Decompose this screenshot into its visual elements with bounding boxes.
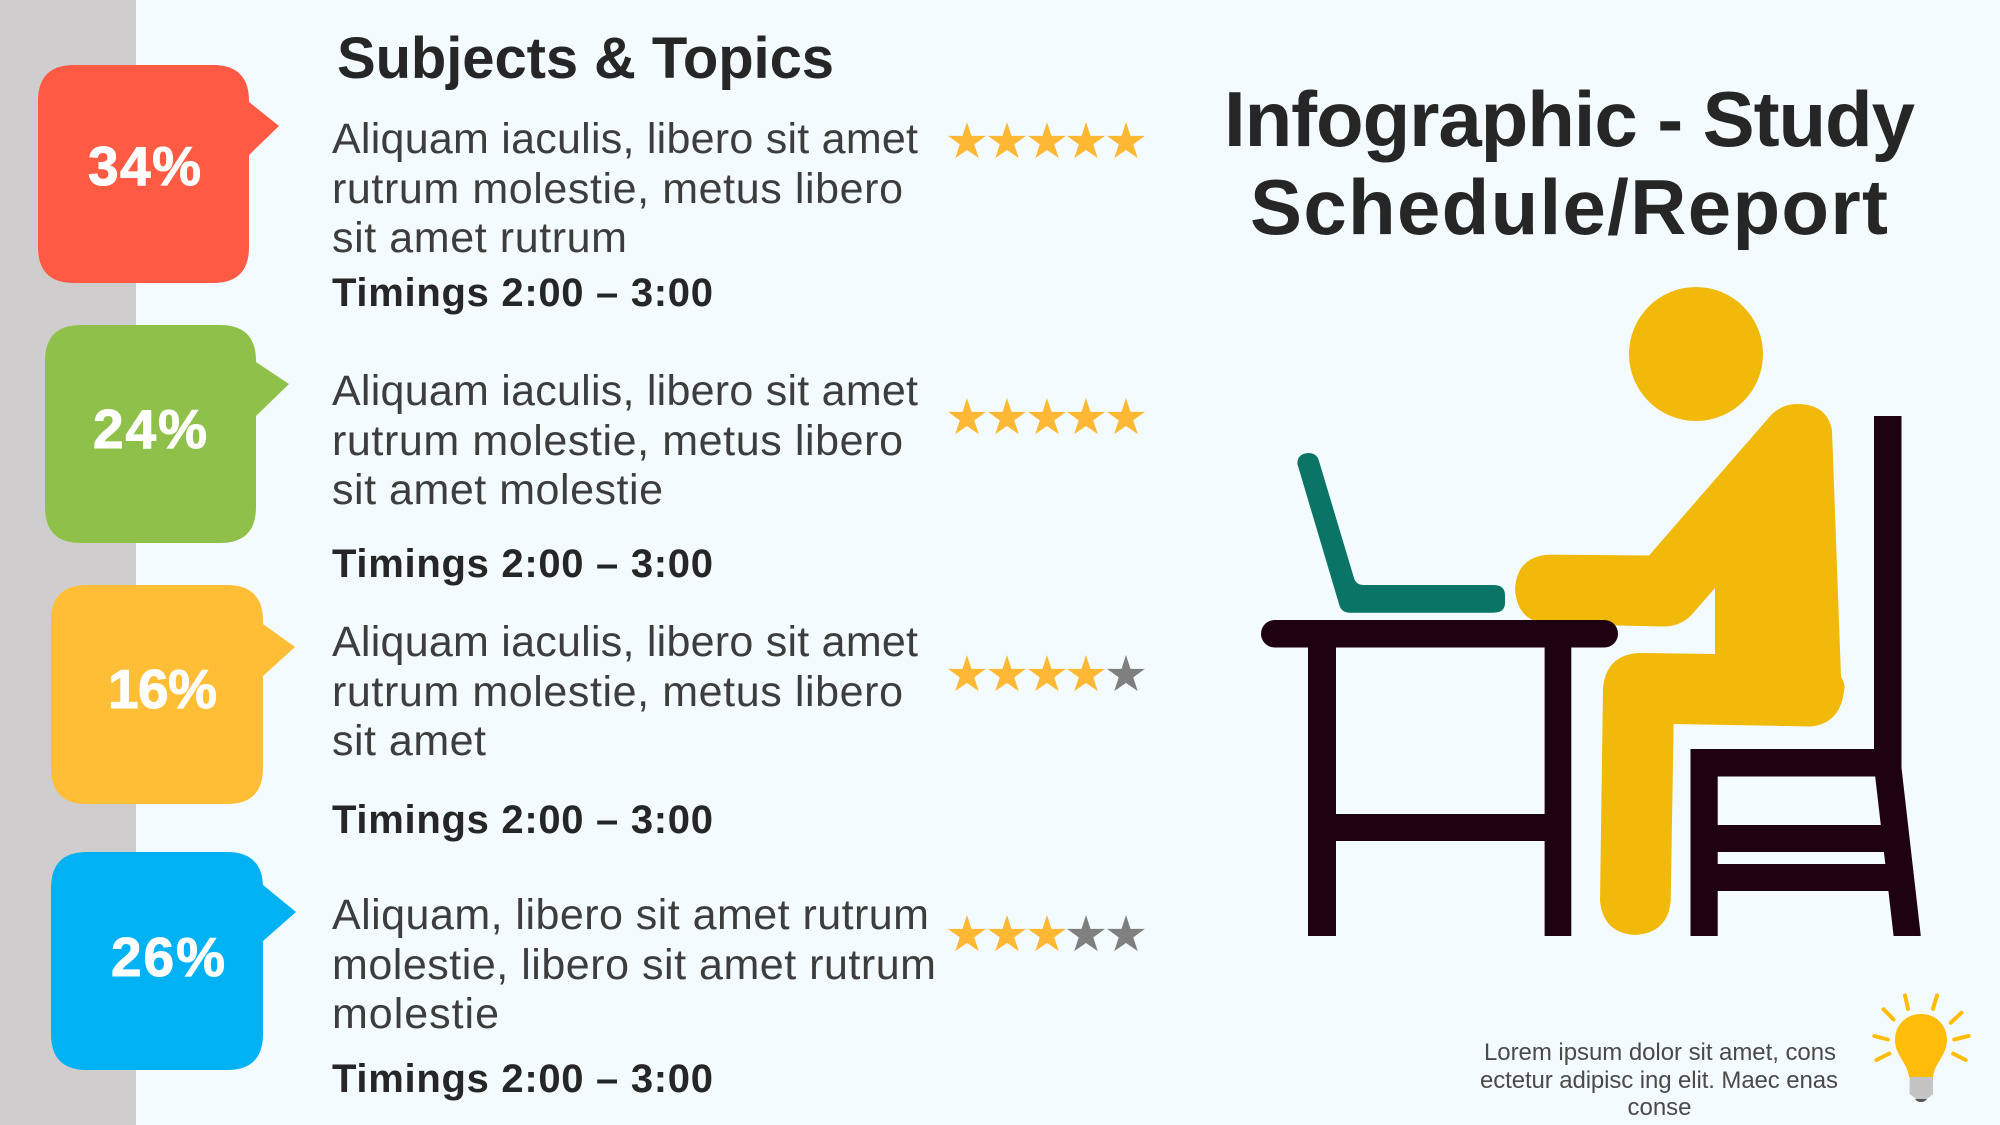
badge: 16%: [51, 585, 295, 804]
badge: 24%: 24%: [93, 398, 207, 460]
caption: conse: [1628, 1094, 1692, 1121]
title: [1224, 75, 1915, 251]
badge: 26%: [51, 852, 296, 1070]
description 3: rutrum molestie, metus libero: [332, 668, 903, 716]
description 4: Aliquam, libero sit amet rutrum: [332, 891, 929, 939]
bulb glass: [1895, 1014, 1947, 1077]
rating: four of five stars: [948, 655, 1145, 691]
icon: light bulb: [1874, 995, 1969, 1102]
person head: [1629, 287, 1763, 421]
panel: subject 2: [45, 325, 1145, 586]
badge: 26%: 26%: [111, 926, 225, 988]
caption: [1480, 1039, 1838, 1121]
caption: Lorem ipsum dolor sit amet, cons: [1484, 1039, 1836, 1066]
person body: [1515, 404, 1845, 935]
description 1: rutrum molestie, metus libero: [332, 165, 903, 213]
rating: five stars: [948, 122, 1145, 158]
timings 1: Timings 2:00 – 3:00: [332, 271, 713, 315]
panel: subject 1: [38, 65, 1145, 315]
panel: subject 4: [51, 852, 1145, 1101]
timings 2: Timings 2:00 – 3:00: [332, 542, 713, 586]
caption: ectetur adipisc ing elit. Maec enas: [1480, 1067, 1838, 1094]
bulb tip: [1915, 1099, 1927, 1102]
description 3: Aliquam iaculis, libero sit amet: [332, 618, 918, 666]
description 1: [332, 115, 918, 262]
description 4: [332, 891, 936, 1038]
bulb rays: [1874, 995, 1969, 1060]
badge: 16%: 16%: [108, 658, 217, 720]
laptop: [1297, 453, 1505, 613]
description 3: sit amet: [332, 717, 486, 765]
description 2: [332, 367, 918, 514]
rating: three of five stars: [948, 915, 1145, 951]
bulb base: [1910, 1077, 1933, 1099]
illustration: student at desk with laptop: [1261, 287, 1921, 936]
panel: subject 3: [51, 585, 1145, 842]
badge: 24%: [45, 325, 289, 543]
description 3: [332, 618, 918, 765]
badge: 34%: [38, 65, 279, 283]
description 1: sit amet rutrum: [332, 214, 627, 262]
heading: subjects and topics: Subjects & Topics: [337, 26, 834, 91]
timings 3: Timings 2:00 – 3:00: [332, 798, 713, 842]
description 2: Aliquam iaculis, libero sit amet: [332, 367, 918, 415]
description 1: Aliquam iaculis, libero sit amet: [332, 115, 918, 163]
timings 4: Timings 2:00 – 3:00: [332, 1057, 713, 1101]
title: Schedule/Report: [1250, 163, 1888, 251]
badge: 34%: 34%: [88, 135, 201, 197]
description 4: molestie: [332, 990, 499, 1038]
desk: [1261, 620, 1618, 936]
title: Infographic - Study: [1224, 75, 1915, 163]
description 2: rutrum molestie, metus libero: [332, 417, 903, 465]
chair: [1690, 416, 1921, 936]
grey side band: [0, 0, 136, 1125]
description 2: sit amet molestie: [332, 466, 663, 514]
description 4: molestie, libero sit amet rutrum: [332, 941, 936, 989]
person: [1515, 287, 1845, 935]
rating: five stars: [948, 398, 1145, 434]
